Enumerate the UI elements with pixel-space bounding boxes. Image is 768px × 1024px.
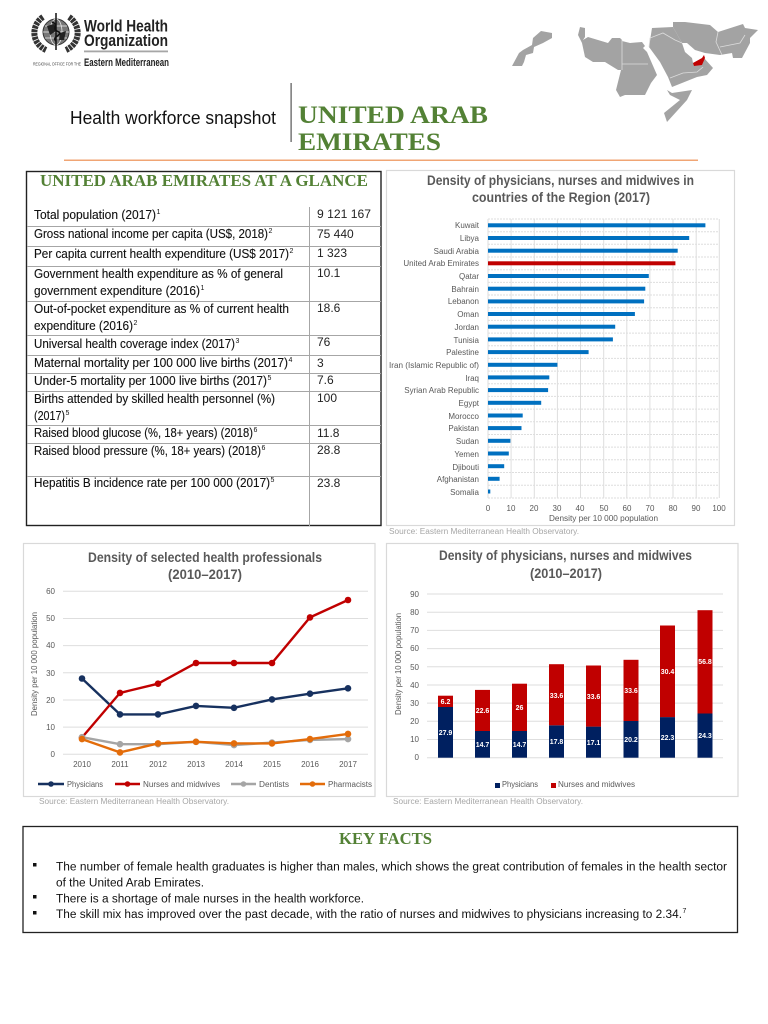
data labels: 14.7 [476,742,489,749]
series: physicians [79,675,351,718]
row labels: Under-5 mortality per 1000 live births (2017) [34,374,267,388]
chart title: Density of selected health professionals [88,550,322,565]
country labels: United Arab Emirates [403,259,479,268]
row labels: government expenditure (2016) [34,284,200,298]
chart title: Density of physicians, nurses and midwives in [427,173,694,188]
legend: Nurses and midwives [143,780,220,789]
country labels: Morocco [448,412,480,421]
chart title: (2010–2017) [168,567,242,582]
y axis labels: 90 [410,590,420,599]
heading: key facts: KEY FACTS [339,829,432,848]
y axis labels: 60 [410,644,420,653]
country labels: Libya [460,234,480,243]
country labels: Bahrain [451,285,479,294]
x axis labels: 100 [712,504,726,513]
row labels: 2 [134,320,138,327]
row values: 1 323 [317,246,347,260]
data labels: 14.7 [513,742,526,749]
country labels: Yemen [454,450,479,459]
bullet list: 7 [682,908,686,915]
row labels: 5 [268,375,272,382]
chart title: countries of the Region (2017) [472,190,650,205]
row labels [34,208,294,490]
y axis labels [394,590,420,762]
country labels [389,221,480,497]
regional office: REGIONAL OFFICE FOR THE [33,62,81,68]
map: Eastern Mediterranean region with UAE highlighted [512,22,758,122]
row values: 100 [317,391,337,405]
x axis labels: 20 [530,504,539,513]
country labels: Kuwait [455,221,480,230]
source note: Source: Eastern Mediterranean Health Observatory. [393,797,583,806]
data labels: 20.2 [624,737,638,744]
row labels: 6 [254,427,258,434]
panel: line chart of selected health professionals [24,544,375,796]
row labels: Raised blood pressure (%, 18+ years) (2018) [34,444,261,458]
data labels: 30.4 [661,669,674,676]
y axis labels: 40 [410,681,420,690]
icon: WHO emblem [34,13,78,50]
y axis labels: 30 [410,699,420,708]
bullet list: of the United Arab Emirates. [56,878,204,890]
WHO logo [33,13,169,69]
WHO logo: Eastern Mediterranean [84,57,169,69]
country labels: Tunisia [454,336,480,345]
data labels: 6.2 [441,699,450,706]
bullet list: The number of female health graduates is higher than males, which shows the great contribution of females in the health sector [56,862,727,874]
row labels: Births attended by skilled health personnel (%) [34,392,275,406]
country labels: Palestine [446,348,480,357]
row values: 10.1 [317,266,341,280]
x axis labels: 2012 [149,760,167,769]
row labels: 5 [66,410,70,417]
title [290,83,488,156]
row labels: 5 [270,477,274,484]
row labels: Out-of-pocket expenditure as % of current health [34,302,289,316]
country labels: Qatar [459,272,479,281]
bullet list [33,862,727,921]
x axis labels: 2015 [263,760,281,769]
x axis labels [486,504,726,523]
x axis labels: 60 [623,504,632,513]
row values: 7.6 [317,373,334,387]
x axis labels: 2016 [301,760,319,769]
panel: regional density bar chart [386,170,734,526]
x axis labels: 30 [553,504,562,513]
heading: at a glance: UNITED ARAB EMIRATES AT A GLANCE [40,171,368,190]
x axis labels: 2013 [187,760,205,769]
x axis labels: 2011 [111,760,129,769]
y axis labels [30,587,56,759]
chart title: Density of physicians, nurses and midwives [439,548,692,563]
y axis labels: 0 [51,750,56,759]
row labels: (2017) [34,409,65,423]
row labels: Gross national income per capita (US$, 2018) [34,227,268,241]
x axis labels: 70 [646,504,655,513]
row values: 75 440 [317,227,354,241]
country labels: Iran (Islamic Republic of) [389,361,479,370]
data labels: 17.8 [550,739,563,746]
row values [317,207,371,490]
country labels: Jordan [455,323,479,332]
country labels: Somalia [450,488,480,497]
country labels: Iraq [465,374,479,383]
country labels: Syrian Arab Republic [404,386,479,395]
country labels: Saudi Arabia [434,247,480,256]
row labels: Raised blood glucose (%, 18+ years) (2018) [34,426,253,440]
legend: Physicians [67,780,103,789]
row labels: Government health expenditure as % of general [34,267,283,281]
data labels: 56.8 [698,659,712,666]
chart title: (2010–2017) [530,566,602,581]
row labels: expenditure (2016) [34,319,133,333]
chart title [439,548,692,581]
country labels: Sudan [456,437,479,446]
y axis labels: Density per 10 000 population [30,612,39,716]
country labels: Lebanon [448,297,479,306]
x axis labels: 80 [669,504,678,513]
y axis labels: 40 [46,641,56,650]
x axis labels: 50 [600,504,609,513]
y axis labels: Density per 10 000 population [394,613,403,715]
x axis labels: Density per 10 000 population [549,514,658,523]
row labels: 1 [156,209,160,216]
x axis labels [73,760,357,769]
data labels [439,659,712,749]
y axis labels: 50 [46,614,56,623]
row values: 18.6 [317,301,341,315]
country labels: Afghanistan [437,475,479,484]
series: nurses and midwives [79,597,351,741]
source note: Source: Eastern Mediterranean Health Observatory. [389,527,579,536]
row labels: 2 [268,228,272,235]
subtitle: Health workforce snapshot [70,108,276,128]
row labels: 3 [236,338,240,345]
row values: 11.8 [317,426,340,440]
data labels: 24.3 [698,733,712,740]
country labels: Djibouti [452,463,479,472]
title: EMIRATES [298,129,441,156]
x axis labels: 40 [576,504,585,513]
source note: Source: Eastern Mediterranean Health Observatory. [39,797,229,806]
x axis labels: 90 [692,504,701,513]
row labels: 2 [290,248,294,255]
x axis labels: 2010 [73,760,91,769]
row labels: Total population (2017) [34,208,156,222]
y axis labels: 60 [46,587,56,596]
panel: UAE at a glance table [26,171,381,526]
data labels: 33.6 [624,688,638,695]
y axis labels: 0 [415,753,420,762]
y axis labels: 30 [46,669,56,678]
x axis labels: 0 [486,504,491,513]
legend [495,780,635,789]
row labels: Per capita current health expenditure (US$ 2017) [34,247,289,261]
row labels: Hepatitis B incidence rate per 100 000 (2017) [34,476,270,490]
bars: nurses and midwives [438,610,712,731]
y axis labels: 70 [410,626,420,635]
bullet list: The skill mix has improved over the past decade, with the ratio of nurses and midwives to physicians increasing to 2.34. [56,909,682,921]
x axis labels: 2014 [225,760,243,769]
row labels: Maternal mortality per 100 000 live births (2017) [34,356,288,370]
organisation name: World Health [84,16,168,36]
series: pharmacists [79,731,351,756]
y axis labels: 10 [410,735,420,744]
x axis labels: 10 [507,504,516,513]
row labels: 1 [200,285,204,292]
legend: Pharmacists [328,780,372,789]
panel: stacked bar chart [386,544,738,796]
data labels: 33.6 [550,693,563,700]
row labels: Universal health coverage index (2017) [34,337,235,351]
series: dentists [79,734,351,748]
y axis labels: 20 [410,717,420,726]
data labels: 33.6 [587,694,600,701]
country labels: Egypt [459,399,480,408]
country labels: Oman [457,310,479,319]
country labels: Pakistan [448,424,479,433]
panel: key facts [23,826,738,932]
data labels: 26 [516,705,523,712]
row values: 23.8 [317,476,341,490]
legend: Nurses and midwives [558,780,635,789]
row labels: 4 [288,357,292,364]
chart title [88,550,322,582]
data labels: 17.1 [587,740,600,747]
legend [38,780,372,789]
data labels: 27.9 [439,730,452,737]
row values: 3 [317,356,324,370]
y axis labels: 20 [46,696,56,705]
data labels: 22.6 [476,708,489,715]
row values: 76 [317,335,331,349]
y axis labels: 10 [46,723,56,732]
y axis labels: 50 [410,663,420,672]
bars: physicians [438,707,712,758]
row values: 28.8 [317,443,341,457]
x axis labels: 2017 [339,760,357,769]
data labels: 22.3 [661,735,674,742]
y axis labels: 80 [410,608,420,617]
title: UNITED ARAB [298,102,488,129]
chart title [427,173,694,205]
bars [488,223,705,494]
row labels: 6 [262,445,266,452]
WHO logo: Organization [84,31,168,50]
row values: 9 121 167 [317,207,371,221]
bullet list: There is a shortage of male nurses in the health workforce. [56,894,364,906]
legend: Physicians [502,780,538,789]
legend: Dentists [259,780,289,789]
